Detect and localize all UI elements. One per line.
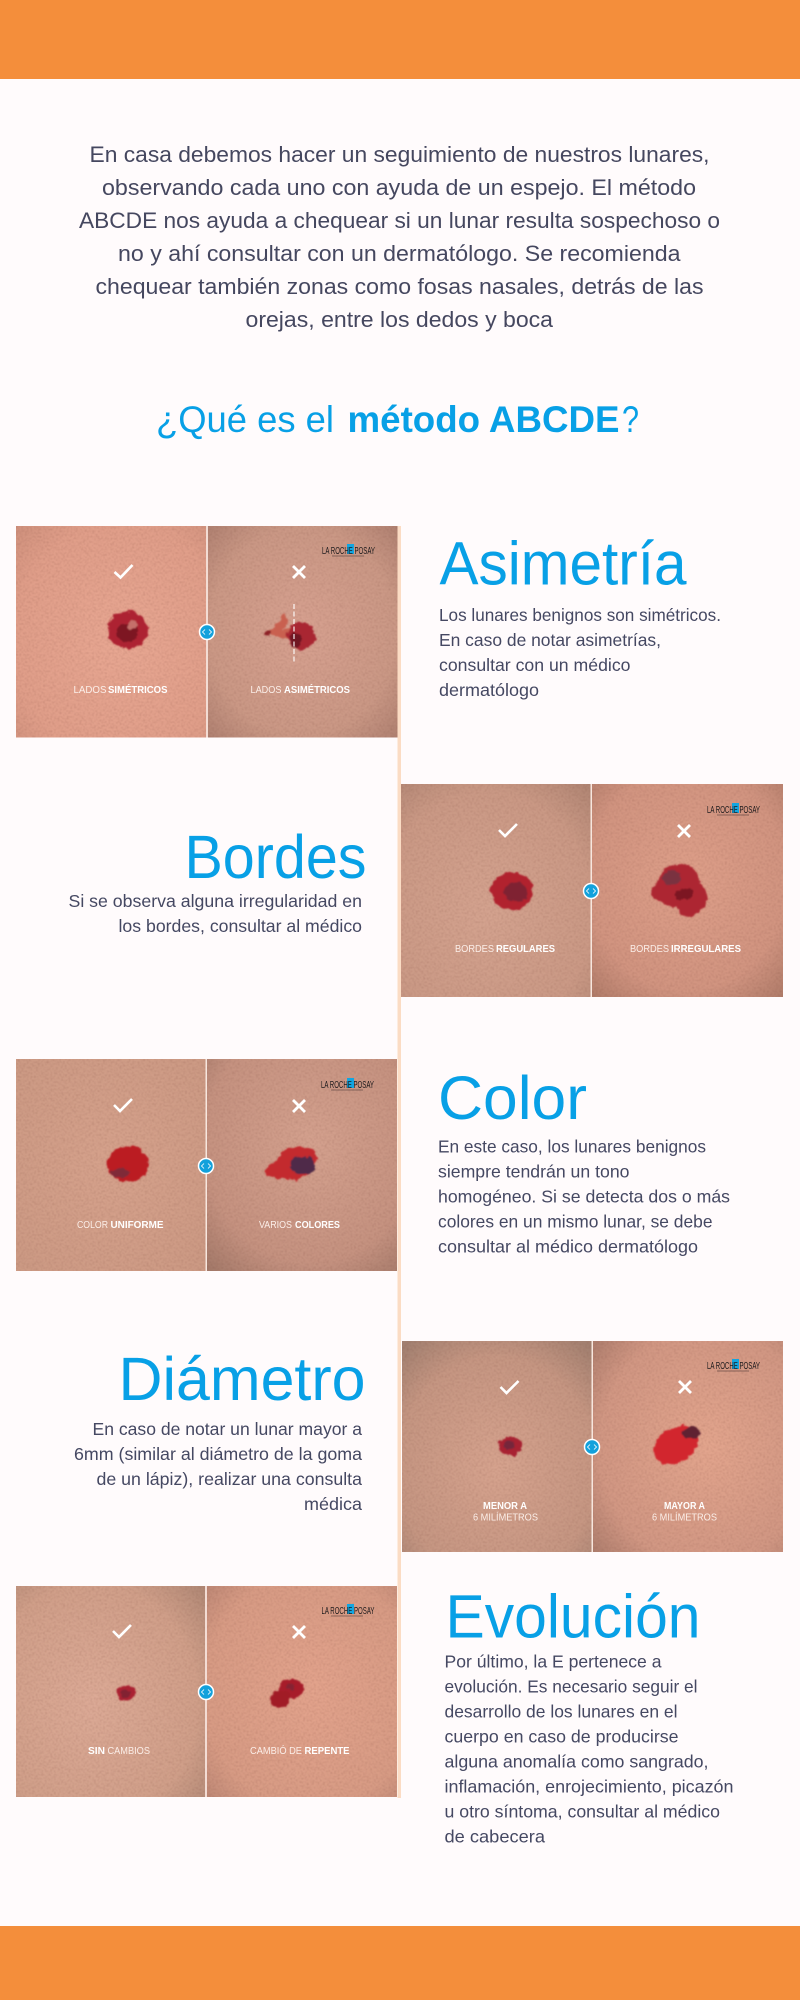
regular mole: [491, 872, 533, 910]
photo divider: [590, 784, 592, 997]
panel: Diámetro text: [74, 1345, 367, 1514]
slider handle: [584, 884, 598, 898]
left skin half: [401, 784, 591, 997]
logo: LA ROCHE POSAY: [322, 546, 375, 557]
label left: SIN: [88, 1745, 105, 1757]
left skin half: [16, 1586, 206, 1797]
icon: cross: [678, 825, 690, 837]
label right: VARIOS: [259, 1219, 292, 1231]
label right: LADOS: [250, 684, 282, 696]
text block: colores en un mismo lunar, se debe: [438, 1212, 712, 1232]
right skin half: [592, 1341, 783, 1552]
intro paragraph: ABCDE nos ayuda a chequear si un lunar resulta sospechoso o: [79, 208, 720, 233]
main heading: ¿Qué es el: [156, 399, 334, 440]
logo: LA ROCHE POSAY: [707, 805, 760, 816]
text block: de cabecera: [444, 1826, 545, 1846]
heading: Asimetría: [440, 530, 687, 598]
slider handle: [198, 1158, 214, 1174]
icon: cross: [679, 1381, 691, 1393]
text block: consultar al médico dermatólogo: [438, 1236, 698, 1256]
label left: MENOR A: [483, 1500, 527, 1512]
photo divider: [592, 1341, 593, 1552]
icon: check: [114, 1099, 132, 1111]
intro paragraph: orejas, entre los dedos y boca: [246, 307, 554, 332]
bottom orange band: [0, 1926, 800, 2000]
small mole: [498, 1436, 522, 1456]
logo: LA ROCHE POSAY: [322, 1606, 375, 1617]
label right: CAMBIÓ DE: [250, 1744, 302, 1757]
right skin half: [591, 784, 783, 997]
label right: BORDES: [630, 943, 669, 955]
text block: evolución. Es necesario seguir el: [444, 1676, 698, 1696]
text block: alguna anomalía como sangrado,: [444, 1752, 708, 1772]
left skin half: [402, 1341, 592, 1552]
panel: Evolución photo: [16, 1586, 397, 1797]
right skin half: [206, 1586, 397, 1797]
text block: los bordes, consultar al médico: [118, 916, 362, 936]
icon: cross: [293, 566, 305, 578]
panel: Color text: [438, 1064, 735, 1256]
text block: inflamación, enrojecimiento, picazón: [444, 1776, 734, 1796]
label right: MAYOR A: [664, 1500, 705, 1512]
text block: siempre tendrán un tono: [438, 1162, 630, 1182]
logo: [707, 1359, 760, 1372]
text block: dermatólogo: [439, 680, 539, 700]
label right: 6 MILÍMETROS: [652, 1510, 717, 1524]
icon: cross: [293, 1100, 305, 1112]
label left: SIMÉTRICOS: [108, 683, 168, 696]
label left: LADOS: [74, 684, 106, 696]
label left: REGULARES: [496, 943, 555, 955]
logo: [322, 1604, 375, 1617]
icon: check: [499, 824, 517, 836]
icon: check: [500, 1381, 518, 1393]
text block: En este caso, los lunares benignos: [438, 1136, 706, 1156]
panel: Asimetría photo: [16, 526, 398, 738]
main heading: método ABCDE: [348, 399, 620, 440]
left skin half: [16, 1059, 206, 1271]
icon: check: [113, 1625, 131, 1637]
unchanged mole: [116, 1686, 136, 1700]
text block: En caso de notar asimetrías,: [439, 630, 661, 650]
asymmetric mole: [264, 614, 315, 650]
text block: cuerpo en caso de producirse: [444, 1726, 678, 1746]
intro paragraph: no y ahí consultar con un dermatólogo. Se recomienda: [118, 241, 681, 266]
text block: de un lápiz), realizar una consulta: [96, 1469, 362, 1489]
label left: 6 MILÍMETROS: [473, 1510, 538, 1524]
label right: ASIMÉTRICOS: [284, 683, 350, 696]
text block: Los lunares benignos son simétricos.: [439, 605, 721, 625]
top orange band: [0, 0, 800, 79]
text block: homogéneo. Si se detecta dos o más: [438, 1186, 730, 1206]
dashed symmetry line: [293, 604, 295, 663]
photo divider: [206, 1059, 207, 1271]
text block: Por último, la E pertenece a: [444, 1652, 662, 1672]
photo divider: [206, 526, 208, 738]
panel: Diámetro photo: [402, 1341, 783, 1552]
text block: u otro síntoma, consultar al médico: [444, 1802, 720, 1822]
uniform mole: [107, 1146, 149, 1182]
text block: Si se observa alguna irregularidad en: [68, 891, 362, 911]
panel: Bordes photo: [401, 784, 783, 997]
changed mole: [270, 1679, 303, 1708]
intro paragraph: observando cada uno con ayuda de un espejo. El método: [102, 175, 696, 200]
logo: LA ROCHE POSAY: [707, 1361, 760, 1372]
large mole: [647, 1417, 705, 1473]
panel: Color photo: [16, 1059, 397, 1271]
main heading: ?: [622, 399, 639, 440]
vertical timeline divider: [398, 526, 401, 1798]
panel: Asimetría text: [439, 530, 726, 700]
intro paragraph: En casa debemos hacer un seguimiento de nuestros lunares,: [90, 142, 710, 167]
heading: Diámetro: [118, 1345, 366, 1413]
label left: COLOR: [77, 1219, 108, 1231]
icon: check: [114, 565, 132, 578]
icon: cross: [293, 1626, 305, 1638]
intro paragraph: chequear también zonas como fosas nasales, detrás de las: [96, 274, 704, 299]
heading: Evolución: [446, 1582, 700, 1650]
logo: LA ROCHE POSAY: [321, 1080, 374, 1091]
right skin half: [206, 1059, 397, 1271]
right skin half: [207, 526, 398, 738]
panel: Evolución text: [444, 1582, 738, 1846]
symmetric mole: [108, 611, 148, 649]
label right: REPENTE: [304, 1745, 350, 1757]
label left: UNIFORME: [110, 1219, 164, 1231]
label right: COLORES: [295, 1219, 340, 1231]
left skin half: [16, 526, 207, 738]
logo: [322, 544, 375, 557]
label left: CAMBIOS: [108, 1745, 150, 1757]
label right: IRREGULARES: [671, 943, 741, 955]
logo: [321, 1078, 374, 1091]
multicolour mole: [264, 1146, 317, 1180]
text block: desarrollo de los lunares en el: [444, 1702, 678, 1722]
irregular mole: [652, 864, 708, 916]
slider handle: [584, 1440, 600, 1454]
slider handle: [200, 624, 214, 640]
photo divider: [205, 1586, 207, 1797]
text block: En caso de notar un lunar mayor a: [92, 1419, 362, 1439]
panel: Bordes text: [68, 823, 367, 936]
slider handle: [198, 1684, 214, 1700]
logo: [707, 803, 760, 816]
heading: Bordes: [184, 823, 366, 891]
heading: Color: [438, 1064, 587, 1132]
text block: médica: [304, 1494, 362, 1514]
text block: consultar con un médico: [439, 655, 630, 675]
text block: 6mm (similar al diámetro de la goma: [74, 1444, 362, 1464]
label left: BORDES: [455, 943, 494, 955]
